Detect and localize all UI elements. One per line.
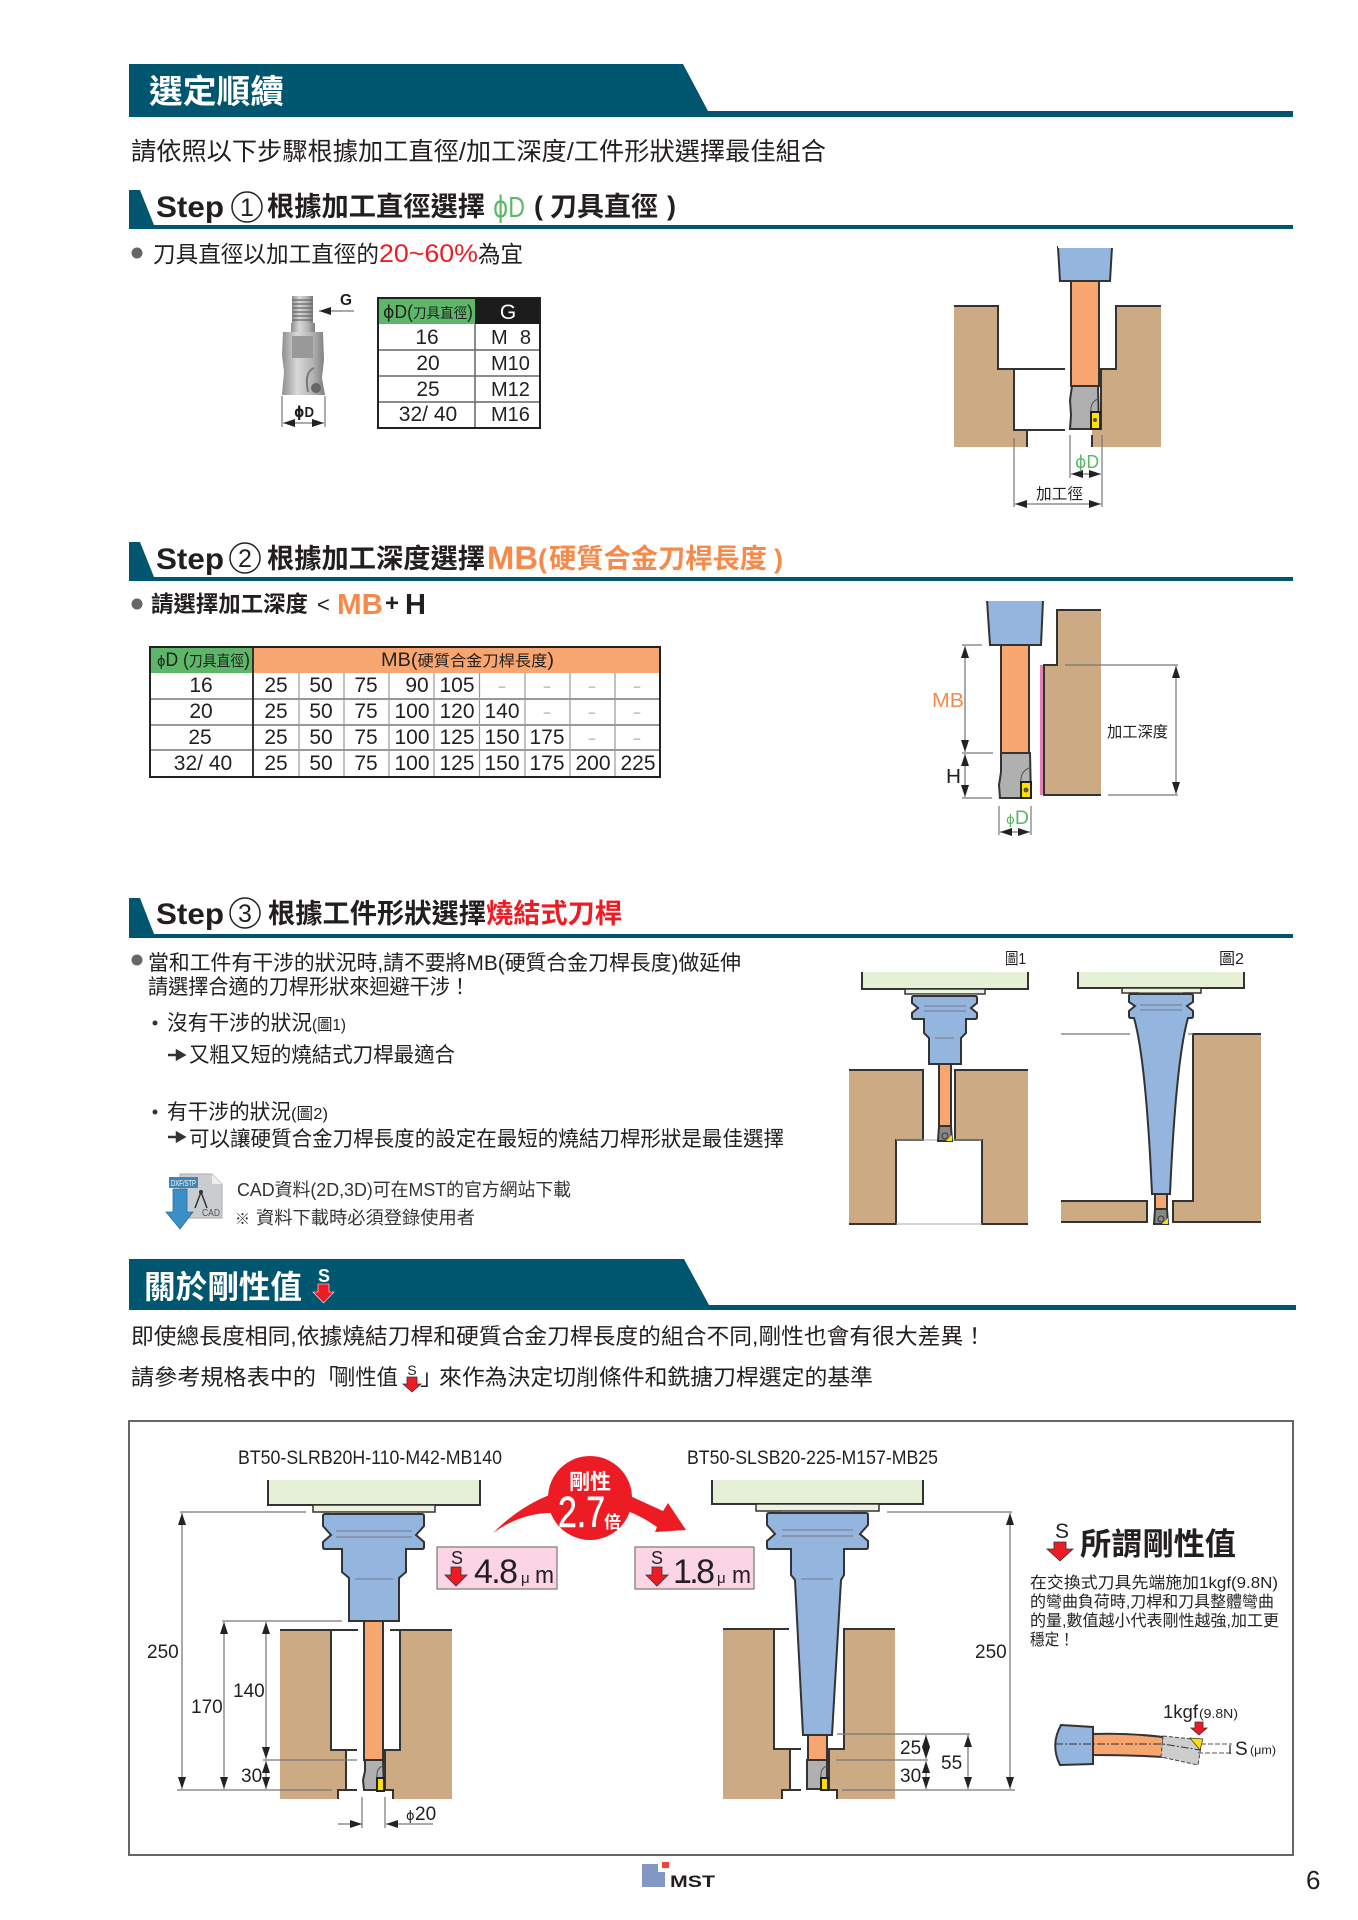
step 2 note: + [385, 590, 399, 617]
row 25: 150 [484, 726, 520, 749]
step 1 heading: 1 [240, 194, 254, 222]
row 16: 50 [309, 674, 333, 697]
right tool dimensions: 55 [941, 1753, 962, 1774]
row 25: 175 [529, 726, 565, 749]
step 1 note: 20~60% [379, 240, 478, 268]
CAD note text: CAD資料(2D,3D)可在MST的官方網站下載 [237, 1180, 571, 1200]
step 3 explanation text: 可以讓硬質合金刀桿長度的設定在最短的燒結刀桿形狀是最佳選擇 [189, 1128, 784, 1151]
diagram: tool bending under load: (μm) [1250, 1743, 1276, 1757]
step 2 heading: 硬質合金刀桿長度 [549, 544, 767, 574]
step 2 heading: ( [538, 544, 547, 574]
diagram: tool bending under load [1055, 1702, 1276, 1765]
step 1 heading: ( [534, 191, 543, 221]
right tool diagram [712, 1480, 923, 1799]
row 32/40: 32/ 40 [174, 752, 232, 775]
table: phi-D and G: 16 [415, 326, 439, 349]
step 1 note: 為宜 [478, 241, 523, 267]
icon: CAD download: CAD [202, 1208, 220, 1219]
step 2 heading: MB [487, 540, 538, 576]
step 3 explanation text: 沒有干涉的狀況 [167, 1012, 312, 1035]
icon: S stiffness arrow: S [318, 1266, 330, 1286]
footer logo: MST [642, 1862, 716, 1891]
icon: CAD download: DXF/STP [171, 1179, 196, 1188]
row 32/40: 150 [484, 752, 520, 775]
step 3 explanation text: (圖2) [291, 1106, 328, 1123]
step 3 explanation text: 請選擇合適的刀桿形狀來迴避干涉！ [148, 976, 470, 999]
row 20: 75 [354, 700, 378, 723]
red badge: stiffness 2.7 times with arrows [493, 1456, 686, 1540]
footer logo: MST: MST [670, 1872, 716, 1891]
row 32/40: 125 [439, 752, 475, 775]
step 2 heading: 根據加工深度選擇 [267, 544, 485, 574]
row 16: 16 [189, 674, 213, 697]
row 20: – [544, 705, 551, 719]
step 1 heading: ) [667, 191, 676, 221]
step 2 heading [129, 540, 1293, 581]
row 25: 25 [188, 726, 212, 749]
panel: stiffness comparison [129, 1421, 1293, 1855]
row 16: 105 [439, 674, 475, 697]
right tool dimensions: 250 [975, 1642, 1007, 1663]
diagram: machining depth: 加工深度 [1107, 723, 1168, 741]
row 16: – [634, 679, 641, 693]
step 2 note: H [405, 589, 426, 621]
step 1 note [132, 240, 523, 268]
left stiffness value box: μ [521, 1570, 530, 1587]
section banner: about stiffness value: 關於剛性值 [144, 1269, 302, 1305]
left stiffness value box: S [451, 1548, 463, 1568]
row 32/40: 225 [620, 752, 656, 775]
stiffness explanation line 2: 剛性值 [334, 1365, 398, 1390]
row 25: – [589, 731, 596, 745]
row 16: – [499, 679, 506, 693]
right tool dimensions [836, 1512, 1015, 1790]
diagram: machining diameter: ϕD [1075, 452, 1099, 473]
table: phi-D and G: 32/ 40 [399, 403, 457, 426]
step 2 note [132, 589, 426, 621]
stiffness definition text: 穩定！ [1030, 1631, 1074, 1649]
row 25: 50 [309, 726, 333, 749]
step 3 explanation text: 當和工件有干涉的狀況時,請不要將MB(硬質合金刀桿長度)做延伸 [148, 952, 741, 975]
figure 2: interference [1061, 951, 1261, 1224]
row 25: 125 [439, 726, 475, 749]
diagram: tool bending under load: (9.8N) [1199, 1706, 1238, 1721]
right stiffness value box [635, 1547, 754, 1591]
row 16 [189, 674, 641, 697]
right tool dimensions: 30 [900, 1766, 921, 1787]
left tool dimensions: 30 [241, 1766, 262, 1787]
diagram: machining depth [932, 599, 1178, 835]
step 2 heading: Step [156, 543, 224, 576]
figure 1: no interference: 圖1 [1005, 951, 1026, 968]
red badge: stiffness 2.7 times with arrows: 剛性 [569, 1471, 611, 1494]
row 20: 50 [309, 700, 333, 723]
step 3 explanation text: 又粗又短的燒結式刀桿最適合 [189, 1044, 455, 1067]
row 32/40: 25 [264, 752, 288, 775]
page number: 6 [1306, 1865, 1320, 1895]
table: phi-D and G: 20 [416, 352, 440, 375]
red badge: stiffness 2.7 times with arrows: 2.7 [558, 1488, 605, 1537]
stiffness definition text [1030, 1574, 1279, 1649]
diagram: machining diameter: 加工徑 [1036, 485, 1083, 503]
stiffness definition heading: 所謂剛性值 [1080, 1527, 1236, 1562]
left tool label: BT50-SLRB20H-110-M42-MB140 [238, 1448, 502, 1469]
CAD note text: 資料下載時必須登錄使用者 [256, 1208, 475, 1228]
step 1 heading: 根據加工直徑選擇 [267, 192, 485, 222]
row 32/40 [174, 752, 656, 775]
table: phi-D and G: M16 [491, 404, 530, 426]
row 16: 75 [354, 674, 378, 697]
table: phi-D and G: M10 [491, 353, 530, 375]
right stiffness value box: 1.8 [673, 1553, 715, 1591]
right tool dimensions: 25 [900, 1738, 921, 1759]
step 1 heading: ϕD [493, 190, 525, 224]
left tool dimensions: 140 [233, 1681, 265, 1702]
step 3 heading: 燒結式刀桿 [486, 899, 622, 929]
section banner: selection order [129, 64, 1293, 117]
left tool dimensions [147, 1512, 436, 1828]
step 3 heading: 3 [238, 900, 252, 928]
row 25: 25 [264, 726, 288, 749]
CAD note text: ※ [235, 1211, 250, 1228]
step 1 heading: Step [156, 191, 224, 224]
right tool label: BT50-SLSB20-225-M157-MB25 [687, 1448, 938, 1469]
diagram: tool bending under load: S [1235, 1739, 1248, 1760]
step 1 heading [129, 190, 1293, 229]
table: phi-D and G: M12 [491, 379, 530, 401]
row 16: – [589, 679, 596, 693]
step 3 heading: Step [156, 898, 224, 931]
stiffness explanation line 2: 來作為決定切削條件和銑搪刀桿選定的基準 [439, 1365, 873, 1390]
diagram: tool bending under load: 1kgf [1163, 1702, 1199, 1722]
table: phi-D and G [378, 298, 540, 428]
cutter head photo with G and phi-D labels [282, 292, 354, 427]
left tool dimensions: 250 [147, 1642, 179, 1663]
left tool dimensions: 20 [415, 1804, 436, 1825]
step 3 heading [129, 898, 1293, 938]
row 25: 75 [354, 726, 378, 749]
stiffness explanation line 1: 即使總長度相同,依據燒結刀桿和硬質合金刀桿長度的組合不同,剛性也會有很大差異！ [131, 1324, 986, 1349]
step 2 note: < [317, 592, 330, 617]
row 25 [188, 726, 641, 749]
row 16: 90 [405, 674, 429, 697]
right stiffness value box: S [651, 1548, 663, 1568]
right stiffness value box: m [732, 1562, 751, 1589]
step 2 note: 請選擇加工深度 [151, 592, 308, 617]
step 3 explanation text [132, 952, 784, 1151]
left tool dimensions: 170 [191, 1697, 223, 1718]
left tool diagram [268, 1480, 480, 1799]
row 20: – [589, 705, 596, 719]
step 1 note: 刀具直徑以加工直徑的 [153, 241, 379, 267]
icon: S stiffness arrow [313, 1266, 334, 1303]
left stiffness value box [437, 1547, 557, 1591]
stiffness definition heading [1047, 1520, 1236, 1562]
row 32/40: 75 [354, 752, 378, 775]
row 32/40: 175 [529, 752, 565, 775]
section banner: about stiffness value [129, 1259, 1296, 1310]
row 32/40: 50 [309, 752, 333, 775]
table: phi-D and G: G [500, 301, 516, 324]
row 20: 100 [394, 700, 430, 723]
row 32/40: 100 [394, 752, 430, 775]
step 3 explanation text: 有干涉的狀況 [167, 1101, 291, 1124]
step 2 heading: ) [774, 544, 783, 574]
figure 2: interference: 圖2 [1219, 951, 1244, 968]
intro text: 請依照以下步驟根據加工直徑/加工深度/工件形狀選擇最佳組合 [131, 138, 826, 166]
banner title: 選定順續 [149, 73, 284, 110]
red badge: stiffness 2.7 times with arrows: 倍 [604, 1512, 621, 1532]
row 32/40: 200 [575, 752, 611, 775]
diagram: machining depth: H [946, 766, 961, 788]
stiffness explanation line 2: 「 [316, 1365, 338, 1390]
row 25: – [634, 731, 641, 745]
stiffness explanation line 2: 請參考規格表中的 [131, 1365, 316, 1390]
row 20: 140 [484, 700, 520, 723]
table: MB lengths by diameter: MB(硬質合金刀桿長度 ) [381, 650, 554, 671]
stiffness explanation line 2 [131, 1362, 873, 1392]
diagram: machining diameter [954, 246, 1161, 507]
step 2 heading: 2 [238, 545, 252, 573]
stiffness explanation line 2: 」 [420, 1365, 442, 1390]
row 20: 25 [264, 700, 288, 723]
row 20 [189, 700, 641, 723]
row 25: 100 [394, 726, 430, 749]
diagram: machining depth: ϕD [1006, 808, 1029, 829]
table: phi-D and G: ϕD(刀具直徑) [383, 302, 473, 323]
step 1 heading: 刀具直徑 [550, 192, 658, 222]
cutter head photo with G and phi-D labels: G [340, 292, 352, 309]
table: phi-D and G: 25 [416, 378, 440, 401]
row 20: 120 [439, 700, 475, 723]
stiffness definition text: 的彎曲負荷時,刀桿和刀具整體彎曲 [1030, 1593, 1274, 1611]
row 16: – [544, 679, 551, 693]
stiffness explanation line 2: S [407, 1362, 417, 1378]
figure 1: no interference [849, 951, 1028, 1224]
table: phi-D and G: M 8 [491, 327, 531, 349]
step 3 heading: 根據工件形狀選擇 [268, 899, 486, 929]
row 20: 20 [189, 700, 213, 723]
row 20: – [634, 705, 641, 719]
table: MB lengths by diameter: ϕD (刀具直徑) [157, 650, 250, 671]
left stiffness value box: 4.8 [474, 1553, 518, 1591]
cutter head photo with G and phi-D labels: ϕD [294, 403, 314, 421]
diagram: machining depth: MB [932, 690, 964, 712]
stiffness definition heading: S [1055, 1520, 1069, 1543]
left stiffness value box: m [535, 1562, 554, 1589]
right stiffness value box: μ [717, 1570, 726, 1587]
step 2 note: MB [337, 589, 383, 621]
CAD note text [235, 1180, 571, 1228]
stiffness definition text: 在交換式刀具先端施加1kgf(9.8N) [1030, 1574, 1278, 1592]
row 16: 25 [264, 674, 288, 697]
stiffness definition text: 的量,數值越小代表剛性越強,加工更 [1030, 1612, 1279, 1630]
step 3 explanation text: (圖1) [312, 1017, 346, 1034]
table: MB lengths by diameter [150, 647, 660, 777]
icon: CAD download [166, 1174, 222, 1229]
left tool dimensions: ϕ [406, 1809, 415, 1824]
